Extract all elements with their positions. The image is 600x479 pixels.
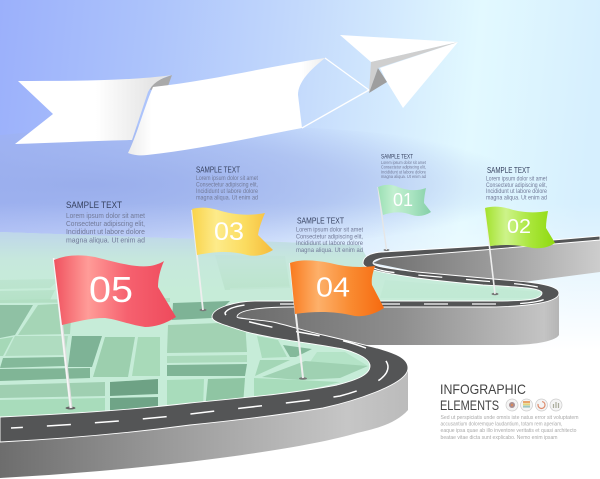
text block: step 04: SAMPLE TEXT [297,215,344,225]
text block: step 01: SAMPLE TEXT [381,154,413,160]
text block: step 02: Lorem ipsum dolor sit amet [486,176,547,182]
title: infographic elements [440,381,526,413]
flag 05: 05 [89,269,133,310]
text block: step 01: Lorem ipsum dolor sit amet [381,160,427,165]
description text: beatae vitae dicta sunt explicabo. Nemo enim ipsam [440,435,558,441]
title: infographic elements: ELEMENTS [440,397,499,413]
description text: Sed ut perspiciatis unde omnis iste natus error sit voluptatem [440,415,579,421]
flag 03: 03 [214,218,244,246]
winding road [0,236,600,442]
text block: step 02 [486,166,548,201]
banner: main ribbon [128,58,325,155]
text block: step 03: Lorem ipsum dolor sit amet [196,176,258,182]
description text: eaque ipsa quae ab illo inventore veritatis et quasi architecto [440,428,576,434]
text block: step 04: Lorem ipsum dolor sit amet [296,226,363,234]
text block: step 02: SAMPLE TEXT [487,166,530,175]
flag 02: 02 [507,216,531,238]
description text [440,415,579,441]
text block: step 04 [296,215,363,254]
text block: step 03 [196,166,259,202]
text block: step 03: magna aliqua. Ut enim ad [196,196,258,202]
flag 01 [378,185,431,251]
text block: step 01: magna aliqua. Ut enim ad [381,174,426,179]
flag 04 [290,260,384,380]
text block: step 05: Lorem ipsum dolor sit amet [66,211,146,220]
text block: step 02: Consectetur adipiscing elit, [486,183,547,189]
banner strings [302,58,369,128]
flag 04: 04 [316,272,350,302]
text block: step 05: SAMPLE TEXT [66,200,122,211]
icon: paper plane [340,35,458,108]
banner: tail ribbon [15,75,172,144]
text block: step 05 [66,200,146,244]
text block: step 04: Consectetur adipiscing elit, [296,234,363,240]
text block: step 01: Consectetur adipiscing elit, [381,165,426,170]
text block: step 05: magna aliqua. Ut enim ad [66,236,145,244]
text block: step 01: Incididunt ut labore dolore [381,169,426,174]
text block: step 05: Consectetur adipiscing elit, [66,219,145,228]
text block: step 05: Incididunt ut labore dolore [66,227,145,236]
city map ground [0,232,542,416]
road walls [0,240,600,478]
text block: step 04: magna aliqua. Ut enim ad [296,247,363,254]
text block: step 02: magna aliqua. Ut enim ad [486,195,547,201]
text block: step 01 [381,154,427,179]
flag 02 [485,207,555,295]
flag 05 [54,255,176,410]
icons row [506,399,562,411]
text block: step 02: Incididunt ut labore dolore [486,189,548,195]
text block: step 03: Incididunt ut labore dolore [196,189,259,195]
description text: accusantium doloremque laudantium, totam rem aperiam, [440,422,563,428]
text block: step 03: Consectetur adipiscing elit, [196,182,258,188]
flag 01: 01 [393,190,413,210]
text block: step 04: Incididunt ut labore dolore [296,240,363,247]
text block: step 03: SAMPLE TEXT [196,166,240,174]
title: infographic elements: INFOGRAPHIC [440,381,526,397]
flag 03 [192,208,273,311]
